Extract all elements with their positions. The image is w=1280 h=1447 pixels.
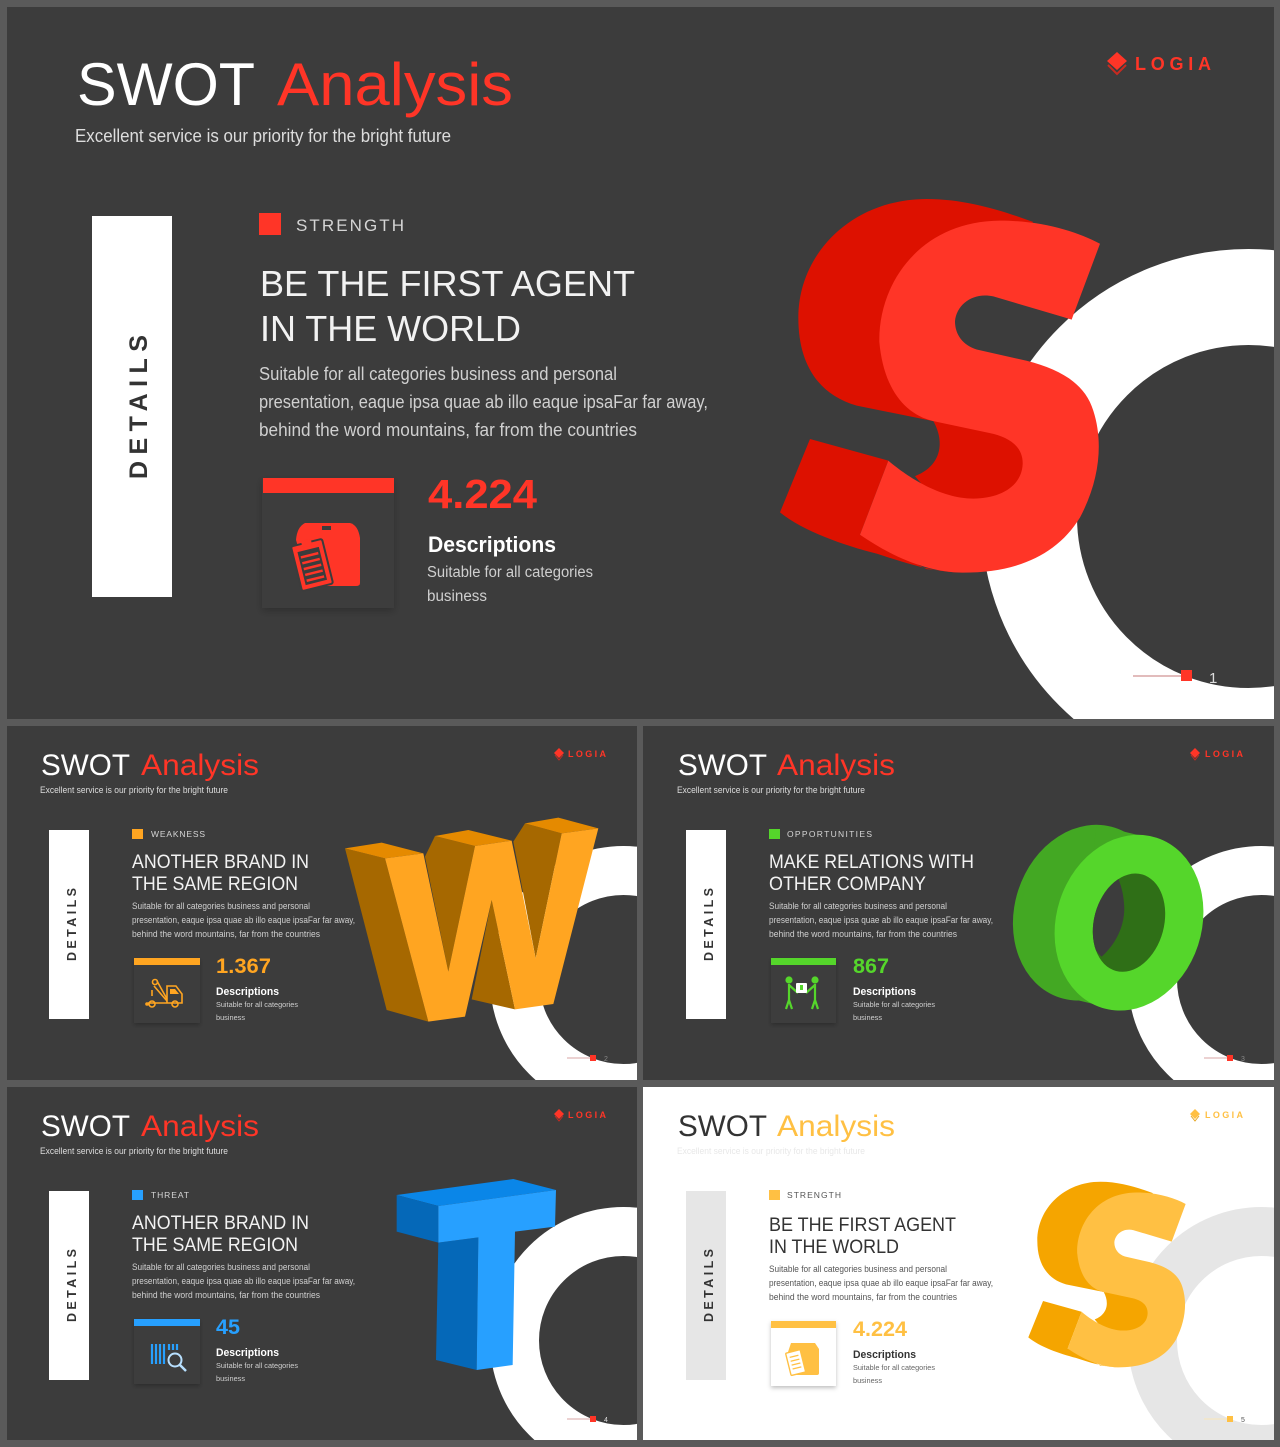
details bar [686,830,726,1019]
logo [554,1109,606,1121]
paragraph: behind the word mountains, far from the countries [132,929,320,939]
paragraph: presentation, eaque ipsa quae ab illo eaque ipsaFar far away, [132,915,355,925]
paragraph [259,364,708,440]
headline [132,1212,309,1256]
paragraph: presentation, eaque ipsa quae ab illo eaque ipsaFar far away, [259,392,708,412]
page marker [1133,670,1217,687]
title: SWOT [77,51,255,118]
ring [514,1232,732,1447]
details bar: DETAILS [125,335,153,479]
panel: weakness slide [7,726,637,1080]
letter S 3D yellow [1028,1182,1186,1367]
logo: LOGIA [568,749,606,759]
stat description: business [853,1376,882,1385]
icon: box and clipboard [290,523,360,591]
page marker: 5 [1241,1417,1245,1424]
title: Analysis [777,749,895,782]
stat number: 45 [216,1316,240,1339]
stat description: Suitable for all categories [216,1000,298,1009]
details bar: DETAILS [702,888,716,961]
ring [1152,1232,1280,1447]
section tag: strength: STRENGTH [296,216,404,235]
stat description: Descriptions [853,986,916,998]
stat description: business [216,1013,245,1022]
title: SWOT [678,749,767,782]
headline [260,263,635,349]
paragraph: behind the word mountains, far from the countries [132,1290,320,1300]
icon: tow truck [146,980,182,1007]
stat description [427,532,593,605]
stat description: Descriptions [853,1349,916,1361]
title: Analysis [141,749,259,782]
section tag: opportunities: OPPORTUNITIES [787,829,872,839]
ring [514,870,732,1088]
title [77,51,513,118]
title: SWOT [678,1110,767,1143]
headline: THE SAME REGION [132,873,298,895]
title: Analysis [777,1110,895,1143]
headline: MAKE RELATIONS WITH [769,851,974,873]
panel: opportunities slide [643,726,1274,1080]
logo: LOGIA [1205,749,1244,759]
stat description: Suitable for all categories [427,564,593,581]
subtitle: Excellent service is our priority for the bright future [40,785,228,795]
stat card with icon [134,1319,200,1384]
stat number: 1.367 [216,955,271,978]
paragraph: behind the word mountains, far from the countries [769,929,957,939]
headline: ANOTHER BRAND IN [132,1212,309,1234]
headline [769,1214,956,1258]
icon: two people with parcel [785,976,819,1009]
icon: barcode and magnifier [152,1344,186,1371]
subtitle: Excellent service is our priority for the bright future [75,126,451,146]
title: Analysis [141,1110,259,1143]
page marker [567,1055,608,1063]
details bar [49,830,89,1019]
paragraph [132,901,355,939]
headline: ANOTHER BRAND IN [132,851,309,873]
paragraph: behind the word mountains, far from the countries [769,1292,957,1302]
panel: main strength slide [7,7,1274,719]
ring [1152,870,1280,1088]
section tag: threat: THREAT [151,1190,189,1200]
page marker [567,1416,608,1424]
page marker: 2 [604,1056,608,1063]
letter T 3D [397,1179,556,1370]
stat card with icon [262,478,394,608]
paragraph: Suitable for all categories business and personal [769,901,947,911]
stat description: Suitable for all categories [853,1363,935,1372]
logo: LOGIA [568,1110,606,1120]
stat card with icon [134,958,200,1023]
logo [1107,52,1211,74]
stat description [216,1347,298,1383]
stat description: Descriptions [428,532,556,557]
page marker [1204,1055,1245,1063]
letter W 3D [345,818,598,1022]
section tag: strength [259,213,404,235]
subtitle: Excellent service is our priority for the bright future [40,1146,228,1156]
stat description: Suitable for all categories [216,1361,298,1370]
logo [554,748,606,760]
stat card with icon [771,1321,836,1386]
headline [132,851,309,895]
title [41,1110,259,1143]
paragraph [769,1264,993,1302]
panel: light strength slide [643,1087,1274,1440]
paragraph: presentation, eaque ipsa quae ab illo eaque ipsaFar far away, [769,1278,993,1288]
paragraph [769,901,993,939]
details bar: DETAILS [65,888,79,961]
paragraph: Suitable for all categories business and personal [769,1264,947,1274]
stat number: 4.224 [853,1318,907,1341]
details bar [92,216,172,597]
section tag: strength: STRENGTH [787,1190,841,1200]
stat description: business [853,1013,882,1022]
headline: OTHER COMPANY [769,873,926,895]
details bar: DETAILS [65,1249,79,1322]
paragraph: Suitable for all categories business and personal [132,901,310,911]
paragraph: presentation, eaque ipsa quae ab illo eaque ipsaFar far away, [769,915,993,925]
logo [1190,1109,1244,1121]
headline: BE THE FIRST AGENT [260,263,635,304]
title: Analysis [277,51,513,118]
paragraph: Suitable for all categories business and personal [132,1262,310,1272]
icon: box and clipboard [786,1343,819,1376]
paragraph: behind the word mountains, far from the countries [259,420,637,440]
headline: THE SAME REGION [132,1234,298,1256]
title [41,749,259,782]
headline: IN THE WORLD [260,308,521,349]
subtitle: Excellent service is our priority for the bright future [677,1146,865,1156]
paragraph: presentation, eaque ipsa quae ab illo eaque ipsaFar far away, [132,1276,355,1286]
details bar [49,1191,89,1380]
section tag: weakness: WEAKNESS [151,829,205,839]
logo [1190,748,1244,760]
letter S 3D [780,199,1100,573]
stat number: 867 [853,955,889,978]
paragraph [132,1262,355,1300]
paragraph: Suitable for all categories business and personal [259,364,617,384]
panel: threat slide [7,1087,637,1440]
title [678,1110,895,1143]
details bar [686,1191,726,1380]
title: SWOT [41,749,130,782]
stat number: 4.224 [428,471,537,517]
logo: LOGIA [1135,54,1211,74]
headline [769,851,974,895]
details bar: DETAILS [702,1249,716,1322]
stat description: Descriptions [216,986,279,998]
stat description: Descriptions [216,1347,279,1359]
ring [1029,297,1280,736]
stat description: business [216,1374,245,1383]
stat description [853,1349,935,1385]
title [678,749,895,782]
logo: LOGIA [1205,1110,1244,1120]
subtitle: Excellent service is our priority for the bright future [677,785,865,795]
page marker: 1 [1209,670,1217,687]
title: SWOT [41,1110,130,1143]
letter O 3D [1012,824,1204,1010]
stat card with icon [771,958,836,1023]
stat description [853,986,935,1022]
headline: IN THE WORLD [769,1236,899,1258]
page marker [1204,1416,1245,1424]
stat description: business [427,588,487,605]
section tag: threat [132,1190,189,1200]
page marker: 3 [1241,1056,1245,1063]
stat description: Suitable for all categories [853,1000,935,1009]
stat description [216,986,298,1022]
page marker: 4 [604,1417,608,1424]
headline: BE THE FIRST AGENT [769,1214,956,1236]
